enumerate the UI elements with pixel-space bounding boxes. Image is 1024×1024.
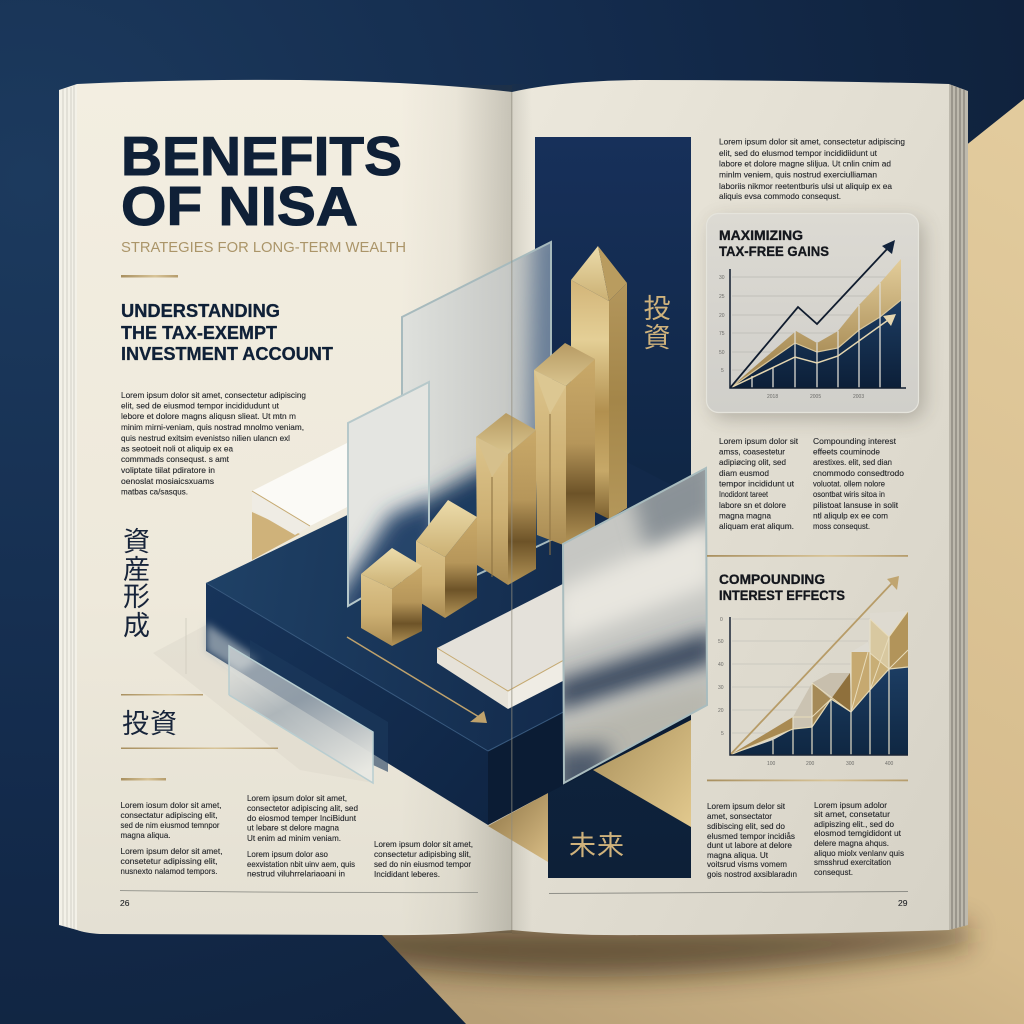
card: maximizing tax-free gains	[706, 214, 923, 418]
two-column text under card, left: aliquam erat aliqum.	[719, 521, 794, 531]
glass panel: large back	[401, 240, 552, 582]
chart 2 axis labels: 40	[718, 662, 724, 668]
section heading	[719, 572, 845, 603]
lower-right text, left column	[707, 801, 797, 879]
lower-right text, left column: voitsrud visms vomem	[707, 859, 787, 869]
bottom text column 1: Lorem ipsum delor sit amet,	[120, 846, 222, 856]
chart 1 axis labels: 50	[719, 350, 725, 356]
gold bar 5	[571, 246, 627, 519]
chart 2 axis labels: 20	[718, 708, 724, 714]
right intro text: Lorem ipsum dolor sit amet, consectetur adipiscing	[719, 136, 905, 146]
bottom text column 2: Lorem ipsum dolor aso	[247, 849, 328, 859]
lower-right text, left column: dunt ut labore at delore	[707, 840, 792, 850]
left intro text	[121, 390, 306, 496]
lower-right text, right column: aliquo miolx venlanv quis	[814, 848, 904, 858]
gold bar 4	[534, 343, 595, 555]
bottom text column 3: consectetur adipisbing slit,	[374, 849, 471, 859]
platform left face	[206, 583, 488, 825]
bottom text column 3: sed do nin eiusmod tempor	[374, 859, 471, 869]
bottom text column 1: sed de nim eiusmod temnpor	[120, 820, 220, 830]
bottom text column 2: do eiosmod temper InciBidunt	[247, 813, 357, 823]
card heading: MAXIMIZING	[719, 228, 803, 243]
kanji: investment	[644, 294, 670, 353]
bottom text column 1: nusnexto nalamod tempors.	[120, 866, 218, 876]
lower-right text, right column: smsshrud exercitation	[814, 857, 891, 867]
two-column text under card, left	[719, 436, 799, 531]
kanji: asset formation	[123, 527, 150, 641]
panel: navy column	[535, 137, 691, 878]
chart 1 axis labels: 30	[719, 275, 725, 281]
left page spine shading	[400, 85, 512, 933]
gold rule	[121, 778, 166, 780]
front white slab	[437, 565, 640, 709]
chart 1 axis labels: 2018	[767, 394, 778, 400]
back white slab	[252, 443, 400, 560]
left page	[77, 80, 512, 935]
platform top face	[206, 420, 691, 751]
gold rule	[121, 694, 203, 696]
chart 1 axis labels: 2005	[810, 394, 821, 400]
section heading: THE TAX-EXEMPT	[121, 323, 277, 343]
kanji: asset formation: 産	[123, 555, 150, 585]
two-column text under card, left: magna magna	[719, 510, 771, 520]
lower-right text, left column: elusmed tempor incidiås	[707, 831, 795, 841]
lower-right text, left column: Lorem ipsum delor sit	[707, 801, 786, 811]
left intro text: elit, sed de eiusmod tempor incididudunt ut	[121, 400, 280, 410]
chart 1 axis labels: 25	[719, 294, 725, 300]
floor reflection	[153, 618, 373, 783]
kanji: future: 未来	[569, 831, 624, 861]
right intro text	[719, 136, 905, 201]
chart 2 axis labels: 50	[718, 639, 724, 645]
platform right face	[488, 645, 691, 825]
two-column text under card, left: Lorem ipsum dolor sit	[719, 436, 799, 446]
area chart 2	[718, 576, 908, 767]
gold bar 1	[361, 548, 422, 646]
right intro text: elit, sed do elusmod tempor incididiidunt ut	[719, 148, 878, 158]
two-column text under card, right: ntl aliqulp ex ee com	[813, 510, 888, 520]
lower-right text, right column: Lorem ipsum adolor	[814, 800, 887, 810]
spine crease	[511, 92, 512, 930]
bottom text column 2: Ut enim ad minim veniam.	[247, 833, 341, 843]
section heading: UNDERSTANDING	[121, 301, 280, 321]
chart 1 axis labels: 20	[719, 313, 725, 319]
two-column text under card, left: Inodidont tareet	[719, 489, 769, 499]
card heading: TAX-FREE GAINS	[719, 244, 829, 259]
lower-right text, left column: amet, sonsectator	[707, 811, 772, 821]
left intro text: minim mirni-veniam, quis nostrad mnolmo veniam,	[121, 422, 304, 432]
right page spine shading	[512, 84, 532, 934]
kanji: asset formation: 形	[123, 582, 150, 612]
two-column text under card, right: cnommodo consedtrodo	[813, 468, 904, 478]
lower-right text, right column: elosmod temgididont ut	[814, 828, 902, 838]
right page	[512, 80, 949, 935]
chart 2 axis labels: 200	[806, 761, 815, 767]
chart 2 axis labels: 300	[846, 761, 855, 767]
two-column text under card, left: tempor incididunt ut	[719, 478, 795, 488]
lower-right text, right column	[814, 800, 904, 877]
two-column text under card, right: effeets couminode	[813, 446, 880, 456]
bottom text column 1: Lorem iosum dolor sit amet,	[120, 800, 222, 810]
lower-right text, right column: delere magna ahqus.	[814, 838, 889, 848]
gold rule	[121, 748, 278, 749]
bottom text column 2: consectetor adipiscing alit, sed	[247, 803, 358, 813]
bottom text column 2: ut lebare st delore magna	[247, 822, 339, 832]
two-column text under card, left: labore sn et dolore	[719, 500, 786, 510]
two-column text under card, right: arestixes. elit, sed dian	[813, 457, 892, 467]
bottom text column 3: Lorem ipsum dolor sit amet,	[374, 839, 473, 849]
bottom text column 2: Lorem ipsum dolor sit amet,	[247, 793, 347, 803]
line chart 1	[719, 240, 906, 400]
kanji: asset formation: 成	[123, 611, 150, 641]
left intro text: Lorem ipsum dolor sit amet, consectetur adipiscing	[121, 390, 306, 400]
section: compounding interest effects	[718, 572, 908, 767]
left intro text: commmads consequst. s amt	[121, 454, 230, 464]
left intro text: as seotoeit noli ot aliquip ex ea	[121, 444, 233, 454]
kanji: investment: 資	[644, 323, 670, 353]
two-column text under card, right: osontbat wiris sitoa in	[813, 489, 885, 499]
book drop shadow	[300, 925, 968, 977]
two-column text under card, right	[813, 436, 904, 531]
gold rule	[121, 275, 178, 278]
bottom text column 2	[247, 793, 358, 878]
right intro text: minlm veniem, quis nostrud exerciulliaman	[719, 170, 877, 180]
subtitle: STRATEGIES FOR LONG-TERM WEALTH	[121, 239, 406, 256]
kanji: asset formation: 資	[123, 527, 150, 557]
kanji: investment: 投資	[122, 709, 177, 739]
page number right: 29	[898, 898, 908, 908]
gold bar 3	[476, 413, 536, 585]
bottom text column 1: consectatur adipiscing elit,	[120, 810, 218, 820]
glass panel: front frosted	[562, 466, 708, 785]
chart 2 axis labels: 5	[721, 731, 724, 737]
left intro text: matbas ca/sasqus.	[121, 486, 188, 496]
right page edges	[949, 84, 968, 930]
chart 1 axis labels: 5	[721, 368, 724, 374]
glass panel: small back	[347, 380, 430, 608]
title	[121, 125, 402, 237]
bottom text column 3	[374, 839, 473, 879]
gold triangle upper	[560, 655, 691, 827]
bottom text column 2: eexvistation nbit uinv aem, quis	[247, 859, 355, 869]
bottom text column 1: consetetur adipissing elit,	[120, 856, 218, 866]
left intro text: quis nestrud exitsim evenistso nilien ulancn exl	[121, 433, 290, 443]
kanji: investment: 投	[644, 294, 670, 324]
chart 2 axis labels: 100	[767, 761, 776, 767]
left intro text: voliptate tiilat pdiratore in	[121, 465, 215, 475]
arrow on platform	[347, 637, 487, 723]
section heading: INVESTMENT ACCOUNT	[121, 344, 333, 364]
two-column text under card, left: amss, coasestetur	[719, 446, 785, 456]
lower-right text, left column: magna aliqua. Ut	[707, 850, 769, 860]
bottom text column 2: nestrud viluhrrelariaoani in	[247, 868, 345, 878]
left intro text: lebore et dolore magns aliqusn slieat. Ut mtn m	[121, 411, 296, 421]
bottom text column 3: Incididant leberes.	[374, 869, 440, 879]
card heading	[719, 228, 829, 259]
bottom text column 1	[120, 800, 222, 876]
lower-right text, left column: gois nostrod axsiblaradın	[707, 869, 797, 879]
chart 2 axis labels: 0	[720, 617, 723, 623]
chart 1 axis labels: 75	[719, 331, 725, 337]
two-column text under card, right: moss consequst.	[813, 521, 870, 531]
right intro text: laboriis nikmor reetentburis ulsi ut aliquip ex ea	[719, 181, 892, 191]
chart 2 axis labels: 30	[718, 685, 724, 691]
section heading: INTEREST EFFECTS	[719, 588, 845, 603]
title: BENEFITS	[121, 125, 402, 187]
isometric platform	[206, 420, 691, 825]
right intro text: labore et dolore magne sliljua. Ut cnlin cnim ad	[719, 158, 891, 168]
section heading: COMPOUNDING	[719, 572, 825, 587]
two-column text under card, left: diam eusmod	[719, 468, 769, 478]
lower-right text, right column: adipiszing elit., sed do	[814, 819, 894, 829]
two-column text under card, right: Compounding interest	[813, 436, 897, 446]
chart 1 axis labels	[719, 275, 864, 400]
bottom text column 1: magna aliqua.	[120, 830, 170, 840]
lower-right text, left column: sdibiscing elit, sed do	[707, 821, 785, 831]
background: tan field	[302, 99, 1024, 1024]
chart 2 axis labels	[718, 617, 894, 767]
section heading	[121, 301, 333, 364]
left page edges	[59, 84, 77, 930]
page number left: 26	[120, 898, 130, 908]
chart 2 axis labels: 400	[885, 761, 894, 767]
gold triangle lower	[488, 793, 548, 862]
lower-right text, right column: consequst.	[814, 867, 853, 877]
glass panel: lower plate	[229, 640, 388, 783]
gold bar 2	[416, 500, 477, 618]
title: OF NISA	[121, 175, 358, 237]
two-column text under card, right: voluotat. ollem nolore	[813, 478, 885, 488]
two-column text under card, right: pilistoat lansuse in solit	[813, 500, 899, 510]
two-column text under card, left: adipiøcing olit, sed	[719, 457, 786, 467]
lower-right text, right column: sit amet, consetatur	[814, 809, 890, 819]
left intro text: oenoslat mosiaicsxuams	[121, 476, 214, 486]
chart 1 axis labels: 2003	[853, 394, 864, 400]
right intro text: aliquis evsa commodo consequst.	[719, 191, 841, 201]
